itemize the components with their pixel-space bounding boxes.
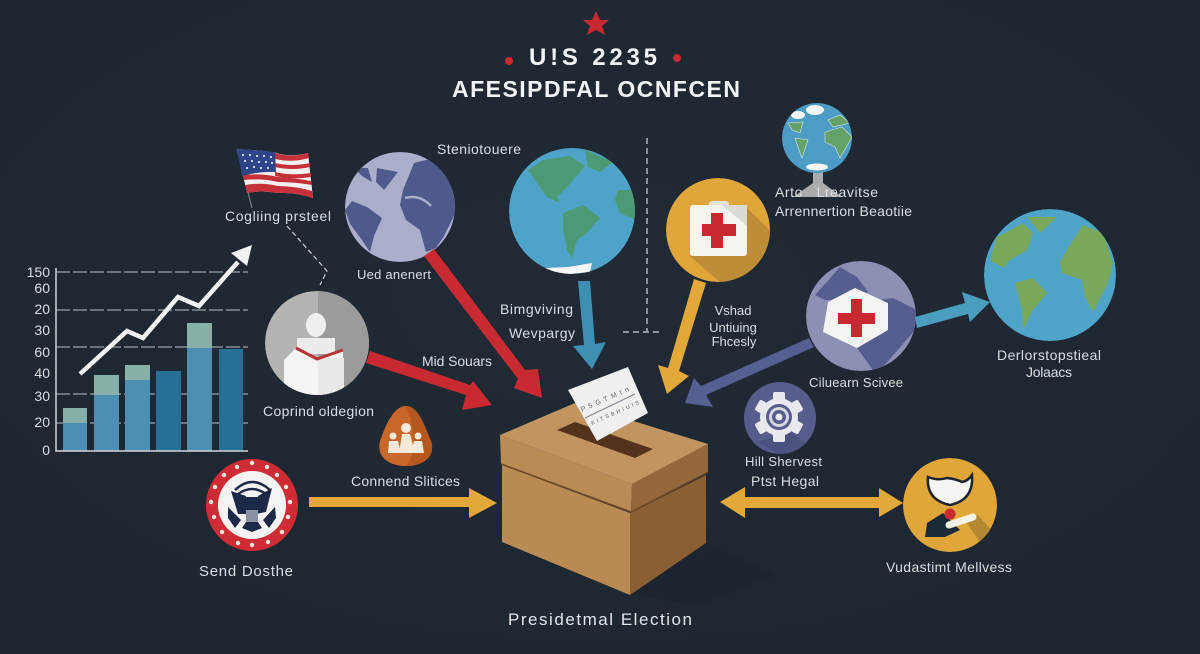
panel: hexagon medical circle (806, 261, 917, 371)
arrow: purple from hexagon (685, 338, 814, 407)
axis labels: 60 (34, 280, 50, 296)
icon: eagle (228, 482, 276, 532)
decorative dashed lines (623, 138, 663, 332)
panel: large green globe (509, 148, 640, 276)
icon: orange people (379, 406, 432, 466)
label: grey icon: Coprind oldegion (263, 403, 374, 419)
arrow: gold down-left (658, 279, 706, 394)
icon: US flag (237, 149, 313, 208)
label: desk globe line 2: Arrennertion Beaotiie (775, 203, 912, 219)
panel: grey ballot figure icon (265, 290, 373, 396)
ballot paper (568, 367, 648, 441)
bars (63, 323, 243, 451)
label: ballot box: Presidetmal Election (508, 610, 692, 629)
title block (452, 11, 740, 102)
panel: small desk globe (782, 103, 852, 197)
label: first aid: Untiuing (709, 320, 757, 335)
label: red arrow: Mid Souars (422, 353, 492, 369)
label: purple globe top: Steniotouere (437, 141, 521, 157)
axis labels: 30 (34, 388, 50, 404)
ballot paper: P 5 G T M t n (580, 386, 630, 414)
label: purple globe bottom: Ued anenert (357, 267, 431, 282)
label: first aid: Vshad (715, 303, 751, 318)
panel: gold hand icon (903, 458, 1000, 552)
title line 1: U!S 2235 (529, 44, 657, 71)
label: seal: Send Dosthe (199, 563, 293, 580)
ballot paper: K I T S B H I U I S (590, 400, 641, 427)
box lid (500, 435, 632, 512)
axis labels: 60 (34, 344, 50, 360)
axis labels: 20 (34, 414, 50, 430)
label: green globe: Bimgviving (500, 301, 573, 317)
label: right globe second line: Jolaacs (1026, 364, 1072, 380)
floor shadow (630, 543, 775, 605)
label: first aid: Fhcesly (712, 334, 757, 349)
label: right globe: Derlorstopstieal (997, 347, 1101, 363)
panel: right globe (984, 209, 1116, 341)
icon: red star (583, 11, 609, 35)
axis labels: 0 (42, 442, 50, 458)
arrow: red from purple globe (424, 249, 542, 398)
arrow: red from grey circle (366, 351, 492, 410)
title line 2: AFESIPDFAL OCNFCEN (452, 76, 740, 102)
icon: cup and hand (925, 475, 973, 537)
label: first aid (709, 303, 757, 349)
label: gear second line: Ptst Hegal (751, 473, 819, 489)
arrow: gold to ballot box (309, 488, 497, 518)
chart axes (56, 268, 248, 451)
label: gold icon: Vudastimt Mellvess (886, 559, 1012, 575)
icon: gear (754, 392, 804, 442)
label: gear: Hill Shervest (745, 454, 822, 469)
panel: first aid circle (666, 178, 770, 282)
panel: gear circle (744, 382, 816, 454)
label: desk globe line 1: Arto Lreavitse (775, 184, 878, 200)
axis labels (27, 264, 50, 458)
panel: ballot box (500, 367, 775, 605)
label: green globe second line: Wevpargy (509, 325, 575, 341)
ring dots (209, 461, 292, 547)
label: flag: Cogliing prsteel (225, 208, 331, 224)
dashed connector (287, 226, 327, 285)
title decoration dots (505, 54, 681, 65)
box body (502, 465, 630, 595)
ballot slot (557, 422, 653, 458)
axis labels: 30 (34, 322, 50, 338)
arrow: gold double headed (720, 487, 903, 518)
axis labels: 20 (34, 301, 50, 317)
bar chart (27, 245, 252, 458)
panel: seal (206, 459, 298, 551)
label: hexagon: Ciluearn Scivee (809, 375, 903, 390)
trend arrow (80, 245, 252, 374)
arrow: teal to right globe (915, 292, 990, 328)
chart gridlines (56, 272, 248, 423)
panel: purple globe (345, 152, 456, 262)
arrow: blue down (573, 281, 606, 369)
label: orange icon: Connend Slitices (351, 473, 460, 489)
axis labels: 40 (34, 365, 50, 381)
axis labels: 150 (27, 264, 50, 280)
icon: first aid kit (690, 201, 747, 256)
